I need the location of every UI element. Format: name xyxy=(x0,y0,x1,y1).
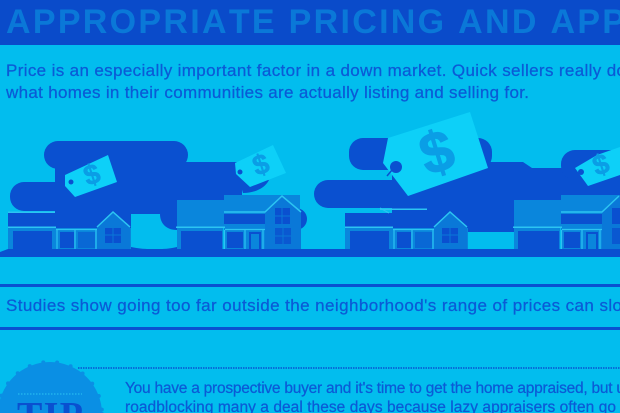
tip badge xyxy=(0,362,102,413)
house three xyxy=(345,208,468,251)
house one xyxy=(8,212,131,251)
price tag large: $ xyxy=(412,117,462,188)
price tag house two: $ xyxy=(249,147,273,182)
intro text xyxy=(5,61,620,102)
house four xyxy=(513,195,620,251)
tip text: You have a prospective buyer and it's time to get the home appraised, but u xyxy=(125,380,620,397)
callout: neighborhood price range xyxy=(0,284,620,330)
dotted divider xyxy=(78,367,620,369)
scene: right neighborhood xyxy=(314,112,620,251)
callout: neighborhood price range: Studies show going too far outside the neighborhood's range of prices can slo xyxy=(6,296,620,315)
intro text: what homes in their communities are actually listing and selling for. xyxy=(5,83,529,102)
intro text: Price is an especially important factor in a down market. Quick sellers really do xyxy=(6,61,620,80)
dark skyline shape right xyxy=(314,138,620,250)
house two xyxy=(176,195,301,251)
ground strip xyxy=(0,249,620,257)
price tag small left: $ xyxy=(80,157,104,192)
price tag small left xyxy=(65,155,117,197)
price tag house two xyxy=(235,145,286,187)
tip text xyxy=(125,380,620,413)
price tag right edge: $ xyxy=(589,147,613,182)
scene: left neighborhood xyxy=(8,141,307,251)
background cutout between houses xyxy=(131,214,177,249)
title band xyxy=(0,0,620,45)
dark skyline shape left xyxy=(10,141,307,250)
price tag right edge xyxy=(575,147,620,186)
price tag large xyxy=(383,112,488,196)
